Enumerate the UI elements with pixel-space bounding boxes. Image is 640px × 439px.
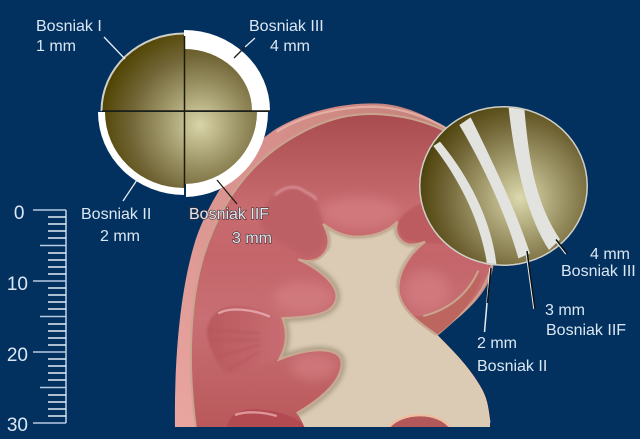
capsule highlight	[277, 107, 447, 132]
label: Bosniak IIF left: Bosniak IIF	[189, 206, 269, 223]
leader lines left diagram	[104, 37, 255, 204]
kidney capsule	[175, 103, 493, 428]
pyramid left	[206, 306, 270, 370]
label: Bosniak I: Bosniak I	[36, 18, 102, 35]
wall stripes	[433, 105, 560, 267]
crosshair	[102, 36, 270, 188]
ruler	[7, 203, 66, 436]
label: 4 mm Bosniak III right: Bosniak III	[561, 263, 636, 280]
right magnified cyst	[419, 105, 588, 267]
renal sinus fill and soft shadow	[279, 222, 490, 428]
label: Bosniak I: 1 mm	[36, 38, 76, 55]
ruler numbers: 0	[14, 203, 24, 224]
label: Bosniak III top: 4 mm	[270, 38, 310, 55]
lower calyx	[388, 415, 451, 428]
pyramid bottom	[227, 409, 307, 428]
label: Bosniak IIF left: 3 mm	[232, 230, 272, 247]
ruler numbers	[7, 203, 28, 436]
label: Bosniak II left: Bosniak II	[81, 206, 151, 223]
leader lines right diagram	[484, 240, 567, 332]
renal cortex	[191, 114, 493, 428]
label: 3 mm Bosniak IIF right: Bosniak IIF	[546, 322, 626, 339]
major ticks	[33, 210, 66, 423]
sinus edge highlight	[437, 335, 490, 423]
quadrant: Bosniak II	[98, 112, 184, 195]
ruler numbers: 20	[7, 345, 28, 366]
ruler numbers: 30	[7, 415, 28, 436]
bottom band	[0, 427, 640, 439]
quadrant: Bosniak III	[184, 30, 270, 110]
kidney illustration	[175, 103, 493, 428]
label: 4 mm Bosniak III right: 4 mm	[590, 246, 630, 263]
quadrant: Bosniak I	[100, 32, 184, 111]
pyramid right	[398, 204, 444, 243]
cortex light patches	[273, 197, 450, 380]
lower right cortex band	[408, 272, 482, 335]
medium ticks	[40, 246, 66, 388]
label: Bosniak III top: Bosniak III	[249, 18, 324, 35]
left cyst quadrant diagram	[98, 30, 270, 197]
pyramid upper	[262, 185, 323, 244]
label: Bosniak II left: 2 mm	[100, 228, 140, 245]
renal sinus outline	[279, 222, 437, 413]
label: 3 mm Bosniak IIF right: 3 mm	[545, 302, 585, 319]
ruler numbers: 10	[7, 274, 28, 295]
quadrant: Bosniak IIF	[184, 112, 268, 197]
minor ticks	[48, 217, 66, 416]
label: 2 mm Bosniak II right: 2 mm	[477, 335, 517, 352]
label: 2 mm Bosniak II right: Bosniak II	[477, 358, 547, 375]
right finger outline	[423, 271, 478, 316]
